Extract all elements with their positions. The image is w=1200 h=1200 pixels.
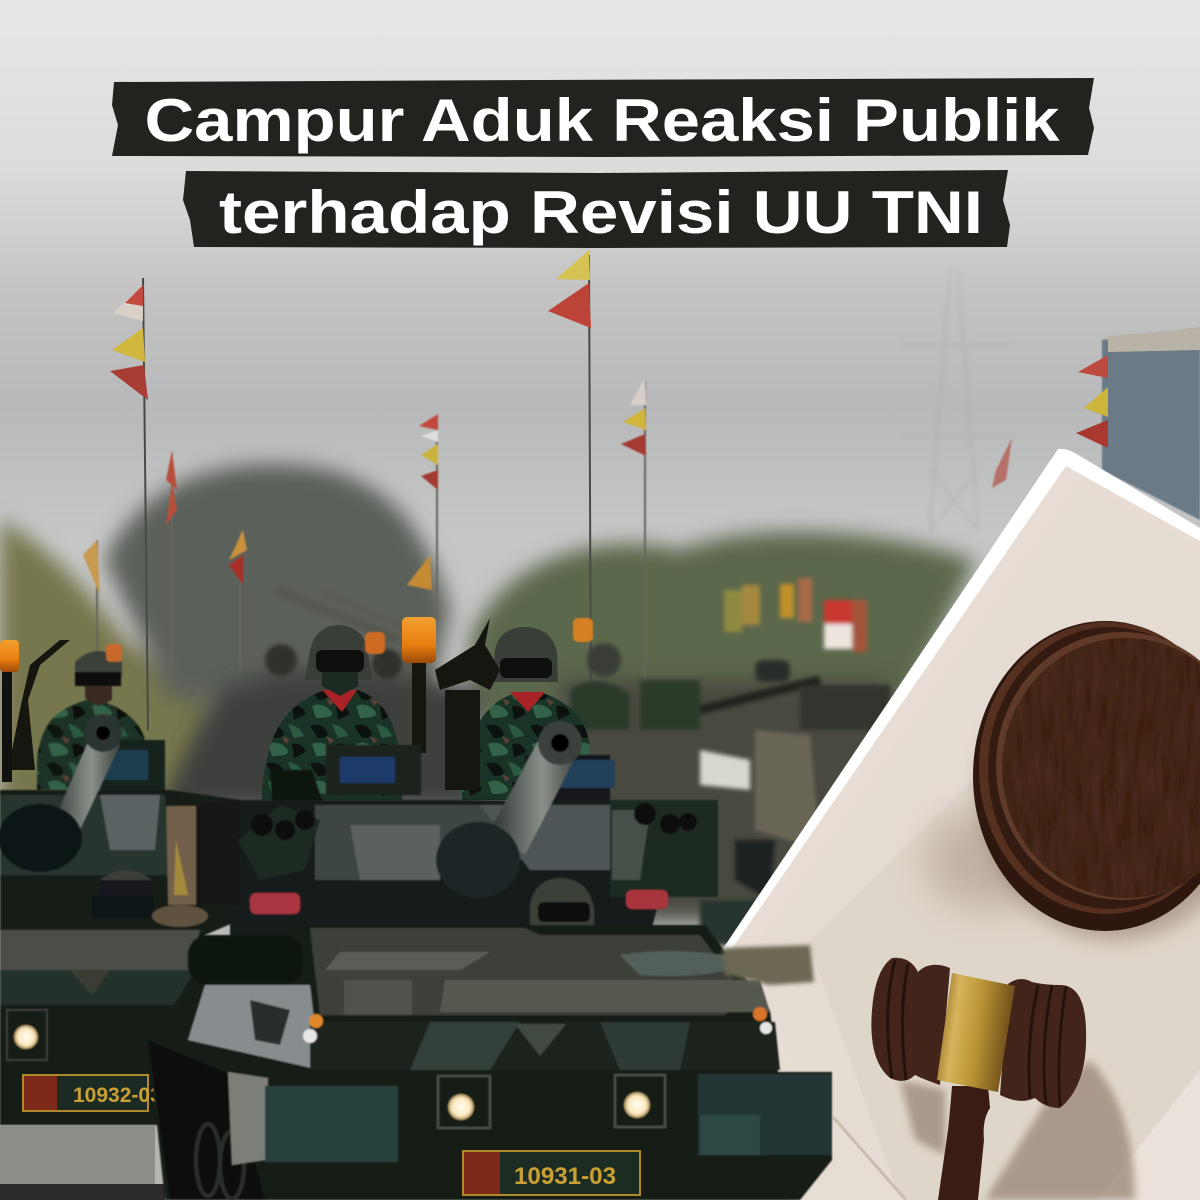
power pylon	[900, 270, 1010, 530]
side sight	[238, 805, 320, 880]
headlights	[438, 1076, 490, 1128]
main licence plate	[463, 1151, 640, 1195]
right flags and truck	[1076, 328, 1200, 520]
engine grates	[310, 928, 745, 1015]
road	[0, 1126, 165, 1200]
machine gun	[435, 618, 500, 790]
left soldier	[37, 651, 145, 790]
title line two: terhadap Revisi UU TNI	[219, 179, 983, 246]
title line one: Campur Aduk Reaksi Publik	[144, 87, 1060, 154]
title bar: line one	[112, 78, 1094, 157]
distant soldier	[265, 643, 630, 730]
extinguishers	[250, 893, 300, 914]
left machine gun	[10, 640, 70, 770]
tracks	[148, 1040, 265, 1200]
hull	[148, 925, 832, 1200]
driver helmet	[530, 878, 594, 930]
distant bunting	[724, 578, 867, 652]
fuel cylinder	[188, 935, 303, 985]
gavel	[871, 958, 1086, 1200]
left beacon	[0, 640, 122, 782]
gavel gold band	[937, 973, 1015, 1092]
main licence plate: 10931-03	[514, 1163, 616, 1190]
centre flag pole	[548, 250, 591, 730]
small flag poles	[83, 378, 1012, 700]
title bar: line two	[183, 170, 1010, 248]
left tank	[0, 714, 240, 1125]
centre soldier one	[262, 625, 402, 800]
centre soldier two	[462, 627, 590, 800]
front fenders	[228, 1072, 268, 1165]
blurred treeline	[0, 464, 975, 920]
left mudguard	[188, 985, 320, 1070]
gavel shadow	[900, 1060, 1135, 1200]
book and pages	[731, 466, 1200, 1200]
shadow under block	[925, 810, 1055, 910]
left licence plate	[23, 1075, 162, 1111]
turret side box	[166, 800, 240, 905]
gavel handle	[938, 1086, 990, 1200]
left flag pole	[110, 278, 148, 730]
turret windows	[326, 745, 421, 795]
centre beacons	[365, 617, 593, 753]
right sight	[634, 803, 656, 825]
blurred side barrel	[722, 945, 814, 985]
book white edge	[722, 449, 1200, 1200]
glacis	[310, 1022, 780, 1070]
turret body	[230, 800, 718, 935]
left licence plate: 10932-03	[73, 1084, 162, 1107]
distant guns and vehicles	[275, 590, 890, 945]
barrel	[490, 732, 578, 855]
side lamps	[309, 1014, 323, 1028]
gavel sound block	[973, 621, 1200, 940]
main tank	[148, 721, 832, 1200]
gavel head	[871, 958, 1086, 1108]
